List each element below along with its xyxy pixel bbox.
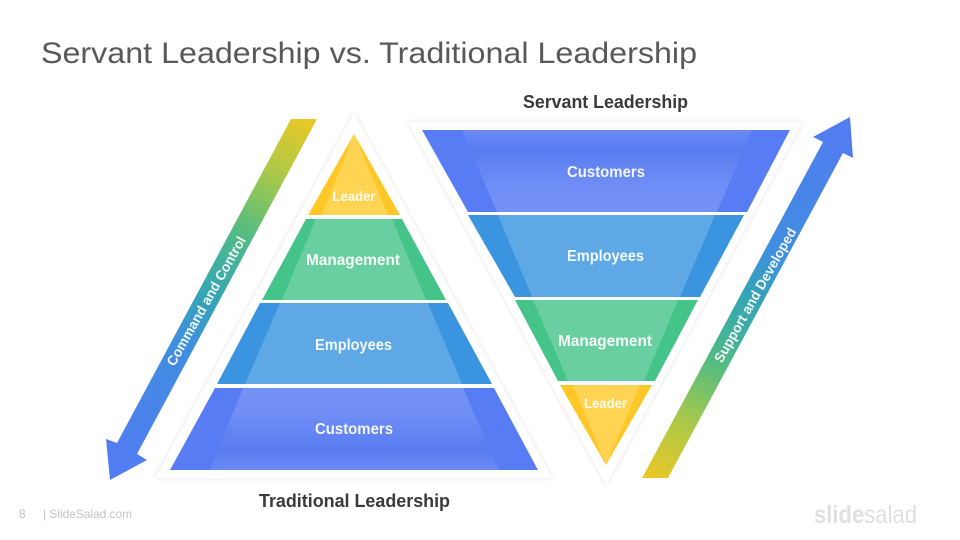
panel: traditional leadership pyramid	[155, 113, 552, 478]
arrow: Command and Control	[106, 119, 317, 480]
panel: servant leadership inverted pyramid	[408, 122, 803, 485]
tier: Leader	[308, 134, 400, 215]
tier: Management: Management	[558, 333, 653, 350]
tier: Management: Management	[306, 252, 401, 269]
heading: Traditional Leadership: Traditional Leadership	[259, 491, 450, 511]
tier: Leader	[560, 385, 652, 465]
arrow label: Command and Control: Command and Control	[163, 234, 249, 368]
tier: Management	[515, 300, 698, 381]
pyramid backing	[155, 113, 552, 478]
inverted pyramid backing	[408, 122, 803, 485]
tier: Employees: Employees	[567, 248, 644, 265]
tier: Customers: Customers	[315, 421, 393, 438]
tier: Customers: Customers	[567, 164, 645, 181]
tier: Employees	[217, 303, 492, 384]
tier: Leader: Leader	[332, 188, 376, 204]
arrow label: Support and Developed: Support and Developed	[711, 225, 799, 365]
footer: site name: | SlideSalad.com	[43, 507, 132, 521]
tier: Leader: Leader	[584, 395, 628, 411]
arrow: Support and Developed	[642, 117, 853, 478]
tier: Employees: Employees	[315, 337, 392, 354]
tier: Customers	[422, 130, 790, 212]
tier: Management	[262, 219, 446, 300]
title: Servant Leadership vs. Traditional Leadership	[41, 37, 697, 70]
logo: slidesalad: slidesalad	[814, 501, 917, 529]
tier: Customers	[170, 388, 538, 470]
tier: Employees	[468, 215, 744, 297]
heading: Servant Leadership: Servant Leadership	[523, 92, 688, 112]
footer: page number: 8	[19, 507, 26, 521]
